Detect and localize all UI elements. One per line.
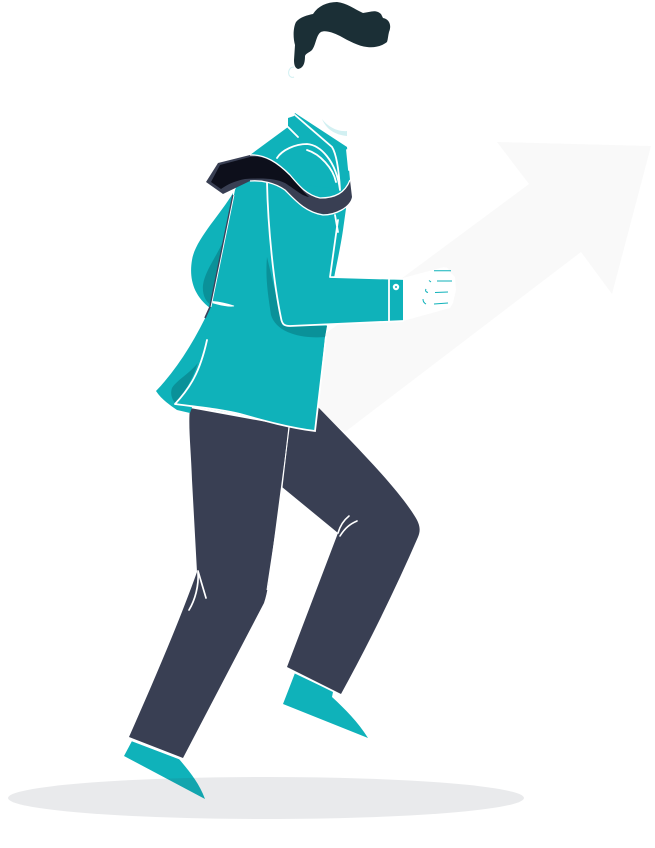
scarf outline	[250, 155, 353, 215]
front shoe	[124, 740, 205, 799]
sleeve shading	[266, 257, 327, 337]
scarf top	[211, 157, 309, 197]
jacket back panel	[156, 193, 233, 413]
back leg	[282, 405, 420, 694]
front leg	[129, 408, 289, 758]
pocket	[213, 302, 234, 306]
scarf	[206, 155, 353, 215]
back shoe	[283, 673, 368, 738]
neck shadow	[322, 119, 347, 136]
background arrow	[300, 142, 651, 432]
jacket body	[175, 113, 350, 431]
ear outline	[289, 67, 294, 77]
hair	[294, 2, 390, 69]
scarf underside	[206, 155, 352, 214]
hand	[403, 267, 456, 321]
jacket	[156, 113, 403, 431]
jacket back shading	[171, 235, 226, 405]
dark lapel line	[205, 195, 233, 318]
sleeve	[267, 180, 403, 326]
white seams	[175, 115, 403, 431]
ground shadow	[8, 777, 524, 819]
cuff button	[393, 284, 399, 290]
